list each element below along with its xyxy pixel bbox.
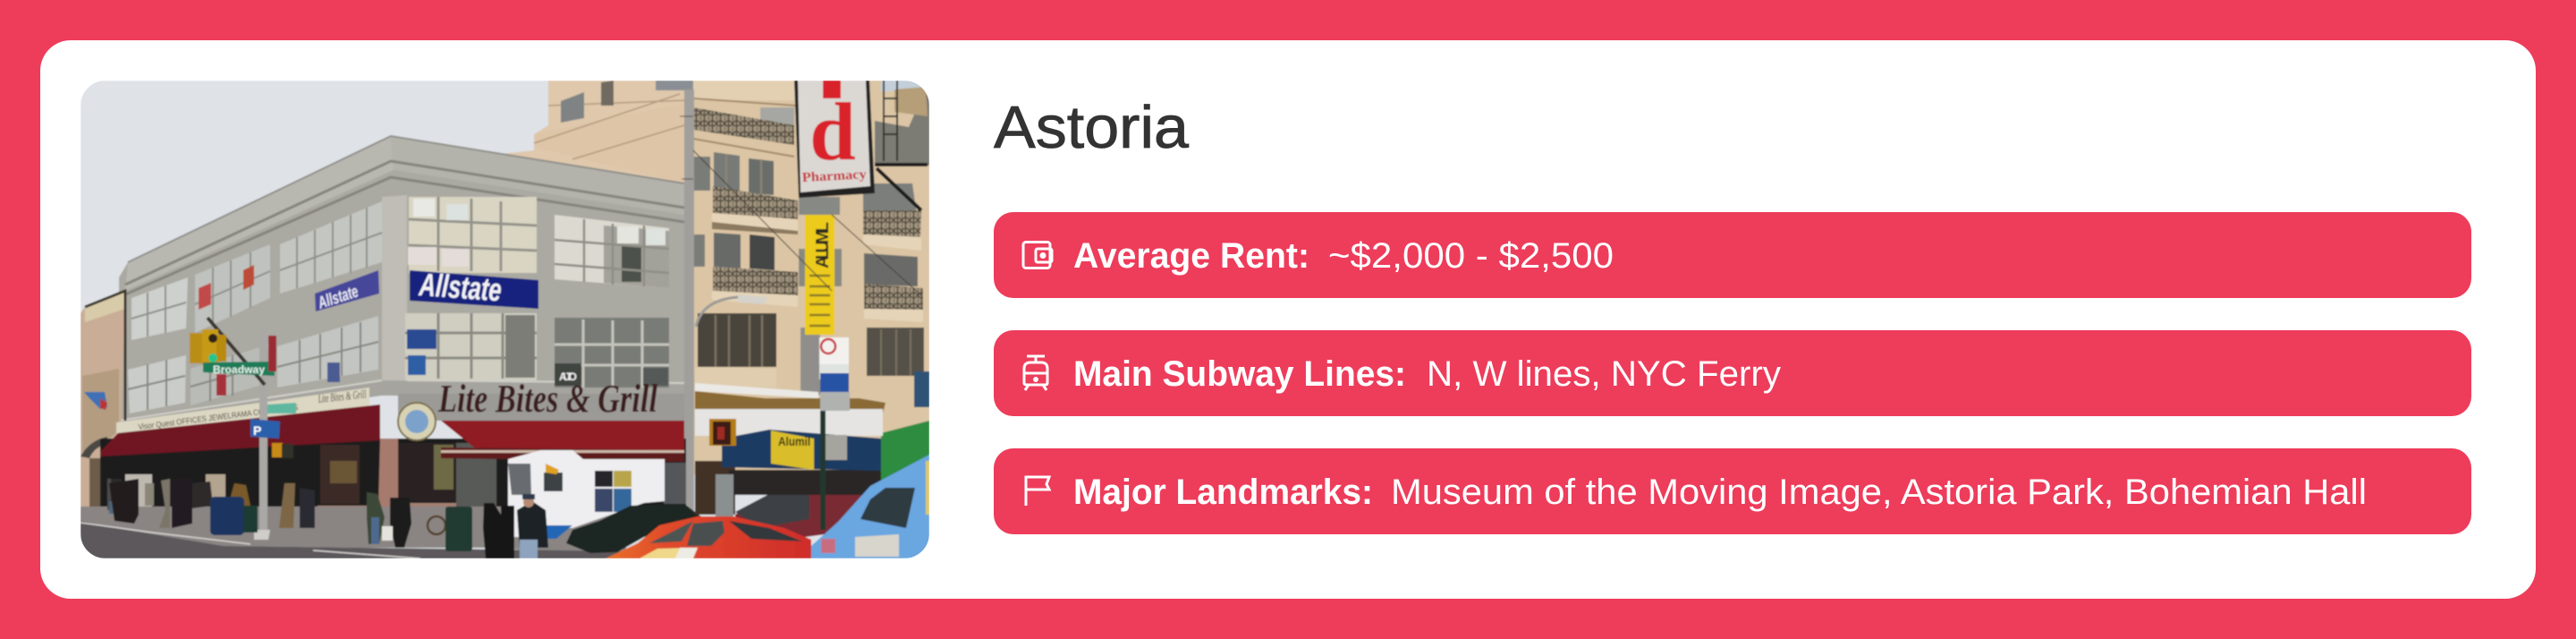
- Lite Bites round sign: [398, 403, 436, 440]
- windows floor three: [694, 234, 705, 267]
- white paper trim: [695, 383, 818, 398]
- label: landmarks: Major Landmarks:: [1073, 473, 1373, 512]
- balcony three: [713, 267, 798, 295]
- brown shop lower: [695, 461, 881, 519]
- pharmacy sign: Pharmacy: [801, 167, 868, 185]
- pharmacy sign: d: [809, 86, 856, 177]
- pharmacy sign: [794, 81, 875, 198]
- black car: [566, 504, 702, 553]
- info bar: subway lines: [994, 330, 2471, 416]
- banners and street signs on pole: [216, 336, 296, 413]
- bicycle and bin: [428, 507, 472, 551]
- beige back building: [505, 81, 694, 183]
- corner pier: [382, 195, 407, 394]
- left face windows, lower row: [128, 316, 378, 413]
- info bar: landmarks: [994, 448, 2471, 534]
- top right window and ladder: [875, 89, 929, 166]
- value: subway lines: N, W lines, NYC Ferry: [1427, 354, 1781, 394]
- Allstate sign, right face: Allstate: [418, 266, 503, 308]
- value: landmarks: Museum of the Moving Image, Astoria Park, Bohemian Hall: [1391, 473, 2367, 512]
- value: average rent: ~$2,000 - $2,500: [1328, 236, 1614, 276]
- lamp head: [738, 294, 767, 304]
- road: [80, 521, 626, 558]
- kerb line: [80, 523, 420, 558]
- top balcony: [760, 107, 795, 125]
- photo: Astoria street corner: [80, 81, 929, 558]
- red awning, right: [441, 418, 684, 462]
- Broadway street sign: Broadway: [213, 363, 265, 376]
- right face windows, upper row: [408, 197, 669, 288]
- right face windows, lower row: AUTO: [559, 371, 577, 383]
- navy awning: [722, 430, 881, 471]
- pedestrians left: [107, 479, 315, 528]
- lower left windows: [698, 313, 776, 367]
- windows floor two: [694, 157, 710, 191]
- white delivery truck: [508, 450, 665, 539]
- Lite Bites script sign: Lite Bites & Grill: [437, 377, 658, 421]
- Tyvek wrap: [695, 409, 883, 436]
- icon: flag: [1026, 477, 1049, 506]
- left tan building: [80, 291, 125, 507]
- red hatchback car: [606, 516, 811, 558]
- Allstate sign, left face: Allstate: [315, 282, 361, 313]
- window bands right: [799, 197, 840, 215]
- parking sign: [250, 419, 280, 439]
- Alumil awning banner: Alumil: [778, 434, 810, 448]
- balcony two: [713, 186, 798, 219]
- stone band right: [398, 394, 684, 421]
- left face windows, upper row: [131, 201, 382, 340]
- cream shop signs: Lite Bites & Grill: [317, 387, 367, 405]
- brown storefront band: [695, 391, 886, 421]
- yellow Alumil banner: [805, 215, 835, 335]
- maroon awning, left: [100, 405, 380, 456]
- parking signs post: [819, 337, 850, 530]
- cream shop signs: [116, 387, 369, 433]
- utility pole: [684, 89, 694, 519]
- street lamp: [696, 297, 738, 327]
- green fence: [881, 421, 929, 501]
- stone corner building: [119, 136, 684, 434]
- icon: tram: [1024, 356, 1047, 390]
- label: subway lines: Main Subway Lines:: [1073, 354, 1406, 394]
- storefront dark base: [99, 437, 687, 508]
- label: average rent: Average Rent:: [1073, 236, 1309, 276]
- person in dark coat: [483, 503, 501, 558]
- back cars: [735, 492, 881, 537]
- Broadway street sign: [203, 362, 275, 376]
- pedestrians centre: [367, 492, 411, 548]
- traffic light and pole: [190, 318, 270, 540]
- tan right building: [693, 81, 929, 474]
- white placard: [825, 435, 847, 460]
- sky: [80, 81, 823, 550]
- pedestrian signal, left: [272, 443, 293, 458]
- lower right windows: [867, 328, 924, 376]
- Alumil awning banner: [771, 430, 814, 470]
- man in dark jacket: [501, 494, 548, 558]
- heading: Astoria: [994, 94, 1190, 161]
- sidewalk: [80, 507, 626, 555]
- info bar: average rent: [994, 212, 2471, 298]
- parking sign: P: [253, 423, 261, 438]
- lower middle door: [801, 328, 820, 395]
- mailboxes: [210, 497, 258, 535]
- pedestrian signal, right: [709, 419, 736, 446]
- blue van: [811, 455, 929, 558]
- cream shop signs: Visor Quest OFFICES JEWELRAMA CONSULTING: [138, 403, 299, 431]
- yellow Alumil banner: ALUMIL: [813, 222, 833, 268]
- lower cornice: [119, 380, 684, 434]
- right face windows, lower row: [405, 313, 669, 388]
- icon: wallet: [1023, 242, 1052, 268]
